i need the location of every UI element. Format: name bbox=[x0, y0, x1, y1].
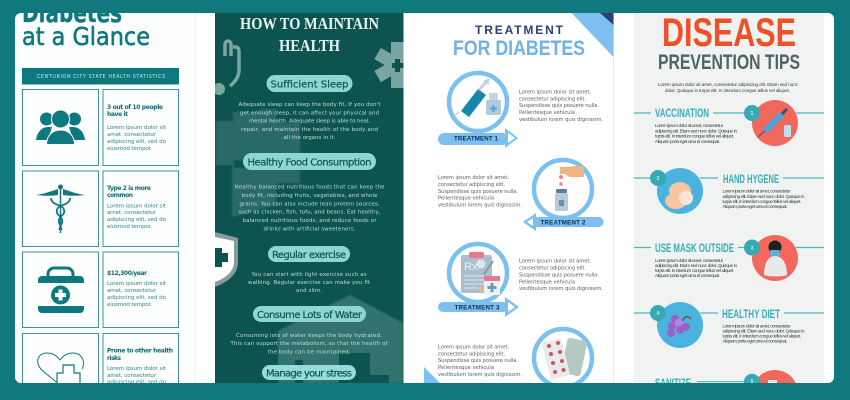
text: treatment 3: Pellentesque vehicula bbox=[519, 279, 575, 285]
treatment 4 bbox=[438, 329, 592, 387]
text: type 2: Type 2 is more bbox=[107, 185, 151, 192]
panel: disease prevention tips bbox=[634, 11, 824, 400]
box row 4: other risks bbox=[22, 333, 179, 383]
icon: stethoscope decoration bbox=[213, 41, 239, 95]
text: treatment 4: consectetur adipiscing elit. bbox=[438, 352, 505, 358]
number 3 bbox=[744, 240, 760, 256]
title: diabetes at a glance bbox=[23, 13, 150, 46]
text: treatment 1: consectetur adipiscing elit. bbox=[519, 96, 586, 102]
section: sufficient sleep: Sufficient Sleep bbox=[270, 80, 348, 90]
arrow label: treatment 1: TREATMENT 1 bbox=[454, 136, 499, 142]
number 5: 5 bbox=[751, 379, 754, 385]
icon: grapes bbox=[667, 315, 691, 337]
icon: shield bbox=[215, 232, 238, 287]
text: type 2: common bbox=[107, 192, 133, 199]
tip 4: healthy diet bbox=[634, 302, 824, 348]
text: treatment 2: Lorem ipsum dolor sit amet, bbox=[438, 175, 509, 181]
box row 3: cost statistic bbox=[22, 252, 178, 328]
icon: large medical cross decoration bbox=[216, 109, 300, 217]
text: treatment 2: Suspendisse quis posuere nulla. bbox=[438, 189, 518, 195]
panel: diabetes at a glance bbox=[22, 13, 196, 383]
text: hand hygene: turpis elit. In interdum congue tellus vel aliquet. bbox=[722, 199, 802, 204]
section: sufficient sleep: all the organs in it. bbox=[284, 135, 336, 141]
number 4 bbox=[650, 305, 666, 321]
arrow label: treatment 3 bbox=[438, 297, 519, 317]
section: consume lots of water bbox=[230, 306, 388, 356]
icon: prescription clipboard bbox=[461, 252, 500, 295]
text: use mask: adipiscing elit. Etiam sed nunc dolor. Quisque in bbox=[655, 263, 737, 268]
text: treatment 2: consectetur adipiscing elit. bbox=[438, 182, 505, 188]
title: treatment for diabetes: FOR DIABETES bbox=[453, 37, 585, 60]
tip 2: hand hygene bbox=[634, 168, 824, 214]
icon: person with mask bbox=[764, 240, 787, 276]
section: regular exercise: You can start with light exercise such as bbox=[250, 272, 367, 278]
section: sufficient sleep bbox=[238, 75, 380, 141]
text: healthy diet: turpis elit. In interdum congue tellus vel aliquet. bbox=[722, 334, 802, 338]
text: other risks: adipiscing elit, sed do bbox=[107, 380, 167, 386]
number 4: 4 bbox=[657, 311, 660, 317]
tip 2: hand hygene: HAND HYGENE bbox=[723, 172, 779, 186]
icon: people group bbox=[36, 110, 85, 144]
arrow label: treatment 1 bbox=[438, 128, 518, 148]
panel: how to maintain health bbox=[213, 13, 421, 383]
text: treatment 4 bbox=[438, 345, 522, 378]
section: consume lots of water: This can support the metabolism, so that the health of bbox=[230, 341, 388, 347]
text: healthy diet: Lorem ipsum dolor sit amet, consectetur bbox=[722, 324, 791, 328]
icon: caduceus bbox=[36, 184, 85, 233]
text: 3 out of 10: eiusmod tempor. bbox=[107, 146, 152, 152]
number 1: 1 bbox=[751, 111, 754, 117]
header bar: health statistics: CENTURION CITY STATE HEALTH STATISTICS bbox=[37, 74, 165, 80]
treatment 3 bbox=[438, 244, 603, 317]
icon: star of life decoration bbox=[374, 42, 404, 88]
text: cost: $12,300/year bbox=[107, 270, 147, 277]
title: how to maintain health: HOW TO MAINTAIN bbox=[240, 14, 380, 33]
section: healthy food consumption: Healthy balanced nutritious foods that can keep the bbox=[234, 185, 385, 191]
text: other risks bbox=[107, 348, 173, 386]
text: type 2 bbox=[107, 185, 167, 230]
number 5 bbox=[744, 374, 760, 390]
intro text: Lorem ipsum dolor sit amet, consectetur adipiscing elit. Etiam sed nunc bbox=[658, 82, 799, 87]
text: 3 out of 10: Lorem ipsum dolor sit bbox=[107, 125, 167, 131]
text: hand hygene: Lorem ipsum dolor sit amet, consectetur bbox=[722, 188, 791, 194]
text: hand hygene: adipiscing elit. Etiam sed nunc dolor. Quisque in bbox=[722, 194, 805, 199]
text: other risks: risks bbox=[107, 355, 121, 362]
intro text bbox=[658, 82, 799, 93]
text: treatment 1: Pellentesque vehicula bbox=[519, 110, 575, 116]
text: vaccination: Lorem ipsum dolor sit amet, consectetur bbox=[655, 123, 723, 128]
panel: treatment for diabetes bbox=[424, 13, 614, 387]
section: healthy food consumption: drinks with artificial sweeteners. bbox=[264, 226, 356, 232]
text: hand hygene bbox=[722, 188, 805, 209]
text: hand hygene: Aliquam porta eget urna et consequat. bbox=[722, 204, 788, 209]
title: disease prevention tips bbox=[658, 11, 800, 74]
text: use mask: Lorem ipsum dolor sit amet, consectetur bbox=[655, 258, 723, 263]
title: how to maintain health: HEALTH bbox=[279, 36, 340, 55]
text: cost bbox=[107, 270, 167, 308]
section: manage your stress bbox=[262, 365, 356, 380]
text: other risks: amet, consectetur bbox=[107, 373, 157, 379]
corner decoration top right bbox=[572, 13, 614, 57]
tip 4: healthy diet: HEALTHY DIET bbox=[722, 307, 780, 321]
title: diabetes at a glance: at a Glance bbox=[22, 22, 150, 51]
text: use mask: Aliquam porta eget urna et consequat. bbox=[655, 273, 720, 278]
section: healthy food consumption: balanced nutritious foods, and reduce foods or bbox=[242, 218, 377, 224]
text: healthy diet: Aliquam porta eget urna et consequat. bbox=[722, 338, 788, 344]
icon: syringe bbox=[758, 109, 791, 137]
text: treatment 3: consectetur adipiscing elit. bbox=[519, 266, 586, 272]
arrow label: treatment 2 bbox=[523, 213, 604, 231]
text: treatment 2: Pellentesque vehicula bbox=[438, 196, 494, 202]
text: 3 out of 10: amet, consectetur bbox=[107, 132, 157, 138]
box row 1: people statistic bbox=[22, 90, 178, 166]
icon: house decoration bbox=[278, 295, 403, 383]
text: 3 out of 10: adipiscing elit, sed do bbox=[107, 139, 167, 145]
section: sufficient sleep: mental health. Adequate sleep is able to heal, bbox=[249, 118, 370, 124]
text: vaccination: Aliquam porta eget urna et consequat. bbox=[655, 139, 720, 144]
treatment 2 bbox=[438, 160, 604, 231]
text: vaccination: turpis elit. In interdum congue tellus vel aliquet. bbox=[655, 134, 734, 138]
number 3: 3 bbox=[751, 246, 754, 252]
tip 1: vaccination bbox=[634, 100, 824, 146]
section: regular exercise: Regular exercise bbox=[272, 250, 346, 261]
text: treatment 4: vestibulum lorem quis dignissim. bbox=[438, 372, 522, 378]
arrow label: treatment 3: TREATMENT 3 bbox=[454, 304, 500, 312]
text: treatment 3 bbox=[519, 259, 603, 292]
tip 1: vaccination: VACCINATION bbox=[655, 106, 709, 120]
section: regular exercise: walking. Regular exercise can make you fit bbox=[248, 280, 370, 286]
text: treatment 1 bbox=[519, 90, 603, 123]
text: treatment 3: Lorem ipsum dolor sit amet, bbox=[519, 259, 591, 265]
text: treatment 3: Suspendisse quis posuere nulla. bbox=[519, 272, 599, 278]
section: consume lots of water: the body can be maintained. bbox=[268, 350, 351, 356]
section: sufficient sleep: Adequate sleep can keep the body fit. If you don't bbox=[238, 102, 380, 108]
text: other risks: Lorem ipsum dolor sit bbox=[107, 366, 167, 372]
text: use mask: turpis elit. In interdum congue tellus vel aliquet. bbox=[655, 268, 734, 273]
title: disease prevention tips: DISEASE bbox=[662, 11, 796, 55]
section: healthy food consumption: body fit, including fruits, vegetables, and whole bbox=[242, 193, 378, 199]
text: cost: adipiscing elit, sed do bbox=[107, 295, 167, 301]
text: treatment 1: Lorem ipsum dolor sit amet, bbox=[519, 90, 591, 96]
text: vaccination: adipiscing elit. Etiam sed nunc dolor. Quisque in bbox=[655, 128, 737, 134]
icon: washing hands bbox=[665, 182, 693, 209]
section: healthy food consumption: grains. You can also include lean protein sources, bbox=[240, 202, 380, 208]
section: sufficient sleep: get enough sleep, it can affect your physical and bbox=[240, 110, 379, 116]
text: type 2: amet, consectetur bbox=[107, 210, 157, 216]
title: treatment for diabetes: TREATMENT bbox=[475, 23, 564, 37]
icon: hand with dropper bbox=[555, 166, 584, 211]
number 1 bbox=[744, 105, 760, 121]
intro text: dolor. Quisque in turpis elit. In interdum congue tellus vel aliquet. bbox=[665, 88, 790, 93]
text: cost: Lorem ipsum dolor sit bbox=[107, 281, 167, 287]
text: 3 out of 10: 3 out of 10 people bbox=[107, 104, 163, 111]
title: treatment for diabetes bbox=[454, 26, 584, 55]
text: treatment 4: Lorem ipsum dolor sit amet, bbox=[438, 345, 509, 351]
section: healthy food consumption: Healthy Food Consumption bbox=[248, 158, 372, 168]
text: treatment 4: Pellentesque vehicula bbox=[438, 365, 494, 371]
section: regular exercise bbox=[248, 246, 370, 294]
text: cost: amet, consectetur bbox=[107, 288, 157, 294]
tip 3: use mask outside: USE MASK OUTSIDE bbox=[655, 241, 734, 255]
treatment 1 bbox=[438, 73, 603, 148]
number 2 bbox=[650, 170, 666, 186]
icon: syringe and vial bbox=[453, 78, 501, 117]
arrow label: treatment 2: TREATMENT 2 bbox=[540, 220, 586, 226]
title: disease prevention tips: PREVENTION TIPS bbox=[658, 51, 800, 74]
text: treatment 2: vestibulum lorem quis dignissim. bbox=[438, 202, 522, 208]
section: sufficient sleep: repair, and maintain the health of the body and bbox=[241, 127, 378, 133]
number 2: 2 bbox=[657, 176, 660, 182]
text: healthy diet bbox=[722, 324, 805, 344]
text: treatment 1: vestibulum lorem quis dignissim. bbox=[519, 117, 603, 123]
title: how to maintain health bbox=[240, 18, 379, 51]
section: healthy food consumption: such as chicken, fish, tofu, and beans. Eat healthy, bbox=[238, 210, 381, 216]
section: consume lots of water: Consume Lots of Water bbox=[257, 310, 363, 321]
text: type 2: Lorem ipsum dolor sit bbox=[107, 204, 167, 210]
text: treatment 1: Suspendisse quis posuere nulla. bbox=[519, 103, 599, 109]
tip 5: sanitize bbox=[655, 370, 798, 400]
text: treatment 4: Suspendisse quis posuere nulla. bbox=[438, 358, 518, 364]
text: treatment 3: vestibulum lorem quis dignissim. bbox=[519, 286, 603, 292]
text: cost: eiusmod tempor. bbox=[107, 302, 152, 308]
tip 3: use mask outside bbox=[634, 235, 824, 281]
header bar: health statistics bbox=[22, 68, 179, 84]
icon: prescription clipboard: Rx bbox=[464, 261, 478, 273]
section: regular exercise: and slim. bbox=[296, 288, 322, 294]
text: use mask bbox=[655, 258, 737, 278]
text: vaccination bbox=[655, 123, 737, 144]
text: other risks: Prone to other health bbox=[107, 348, 173, 354]
text: type 2: adipiscing elit, sed do bbox=[107, 217, 167, 223]
section: manage your stress: Manage your stress bbox=[266, 368, 352, 380]
text: treatment 2 bbox=[438, 175, 522, 208]
text: type 2: eiusmod tempor. bbox=[107, 224, 152, 230]
icon: heart with cross bbox=[37, 352, 84, 383]
corner decoration bottom left bbox=[424, 367, 440, 383]
text: healthy diet: adipiscing elit. Etiam sed nunc dolor. Quisque in bbox=[722, 328, 805, 334]
section: healthy food consumption bbox=[234, 153, 385, 232]
box row 2: type 2 statistic bbox=[22, 171, 178, 246]
icon: first aid kit bbox=[38, 268, 84, 313]
tip 5: sanitize: SANITIZE bbox=[655, 376, 691, 390]
icon: pill blisters bbox=[542, 337, 588, 380]
text: 3 out of 10 bbox=[107, 104, 167, 152]
text: 3 out of 10: have it bbox=[107, 111, 128, 118]
section: consume lots of water: Consuming lots of water keeps the body hydrated. bbox=[236, 333, 382, 339]
